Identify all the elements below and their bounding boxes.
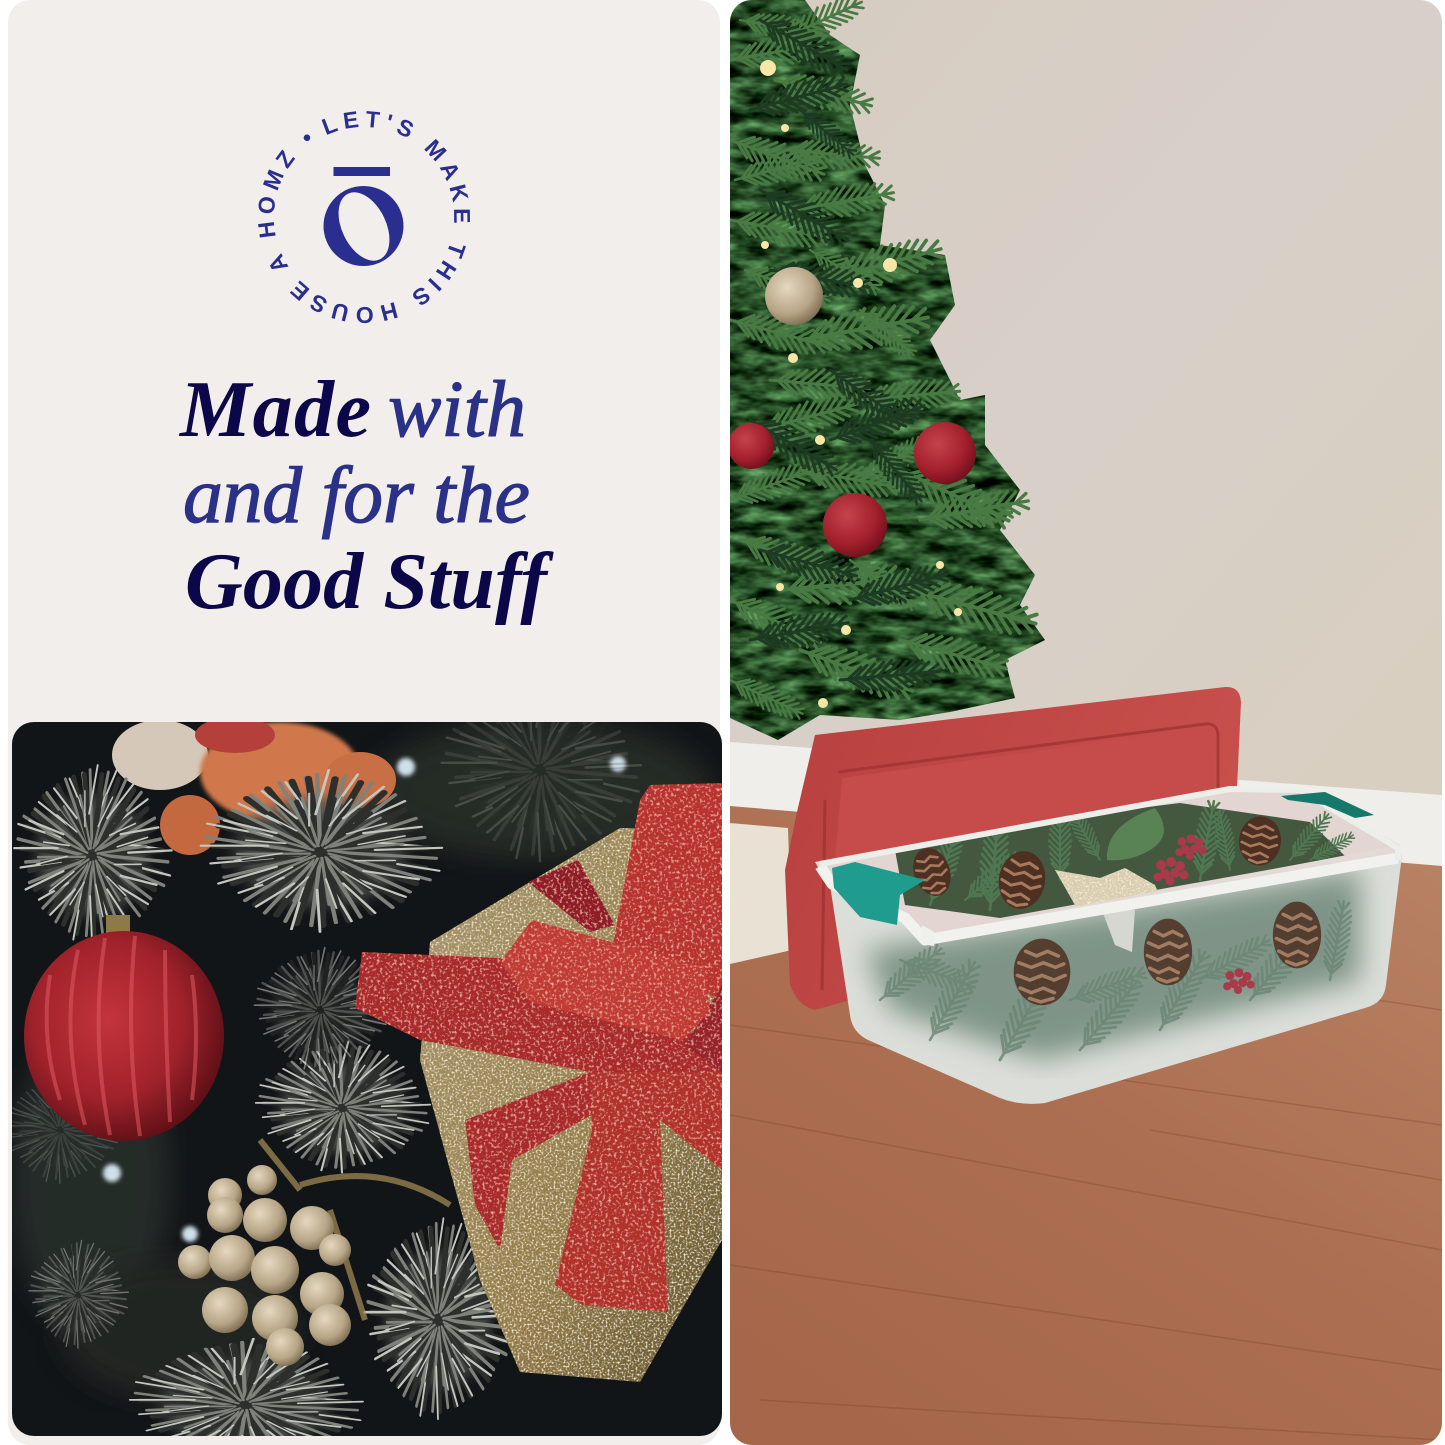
tree lights: [760, 60, 962, 708]
plush toy: [112, 717, 396, 855]
lights: [103, 756, 626, 1242]
wood floor: [730, 806, 1442, 1445]
headline line 1: Made: [178, 366, 371, 454]
storage box lid: [785, 687, 1241, 1010]
greenery seen through box: [865, 870, 1360, 1060]
box interior: [815, 792, 1400, 933]
logo: circular badge: [258, 111, 470, 324]
teal handle right: [1281, 792, 1374, 818]
headline line 1: [178, 366, 526, 454]
headline line 1: with: [388, 366, 526, 454]
tree silhouette: [730, 0, 1045, 740]
rug: [730, 823, 792, 964]
circular slogan text: LET'S MAKE THIS HOUSE A HOMZ •: [258, 111, 470, 324]
headline: [178, 366, 554, 626]
baseboard: [730, 742, 1442, 868]
box body: [828, 855, 1402, 1104]
interior greenery: [1396, 843, 1397, 844]
wall: [730, 0, 1442, 830]
box rim: [820, 789, 1398, 946]
background foliage: [10, 720, 710, 1400]
red ribbon bow: [355, 783, 722, 1312]
tree needles: [724, 0, 1041, 725]
red bauble: [24, 915, 224, 1141]
frosted branches: [12, 722, 642, 1436]
teal handle left: [832, 862, 925, 925]
tree baubles: [728, 267, 976, 557]
photo: storage tote under Christmas tree: [724, 0, 1442, 1445]
headline line 3: Good Stuff: [185, 538, 554, 626]
panel: left cream card: [8, 0, 720, 1445]
headline line 2: and for the: [183, 452, 530, 540]
gift box: [420, 828, 722, 1382]
photo: close-up of decorated tree and gift: [0, 654, 722, 1445]
gold bead cluster: [178, 1140, 450, 1366]
logo mark: [324, 167, 404, 269]
Christmas tree: [724, 0, 1045, 740]
